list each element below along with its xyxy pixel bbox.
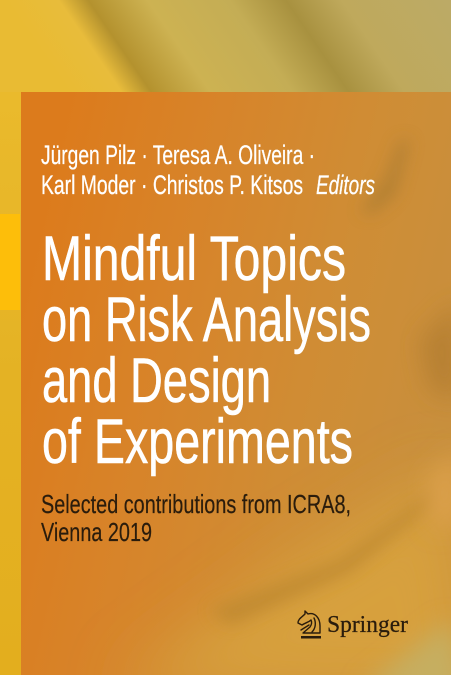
editors — [41, 140, 375, 200]
editors line 2: Karl Moder · Christos P. Kitsos — [41, 170, 303, 200]
icon: horse base — [301, 636, 321, 638]
editors label: Editors — [316, 170, 375, 200]
icon: Springer horse — [298, 611, 320, 633]
title line 4: of Experiments — [42, 407, 353, 477]
publisher logo — [298, 611, 408, 638]
subtitle — [41, 489, 351, 547]
editors line 1: Jürgen Pilz · Teresa A. Oliveira · — [41, 140, 315, 170]
yellow accent block — [0, 214, 20, 310]
subtitle line 2: Vienna 2019 — [41, 517, 152, 547]
background: left strip — [0, 92, 21, 675]
publisher name: Springer — [327, 612, 408, 638]
background: top band — [0, 0, 451, 92]
subtitle line 1: Selected contributions from ICRA8, — [41, 489, 351, 519]
title line 1: Mindful Topics — [42, 224, 346, 294]
title line 3: and Design — [42, 346, 271, 416]
title — [42, 224, 371, 477]
